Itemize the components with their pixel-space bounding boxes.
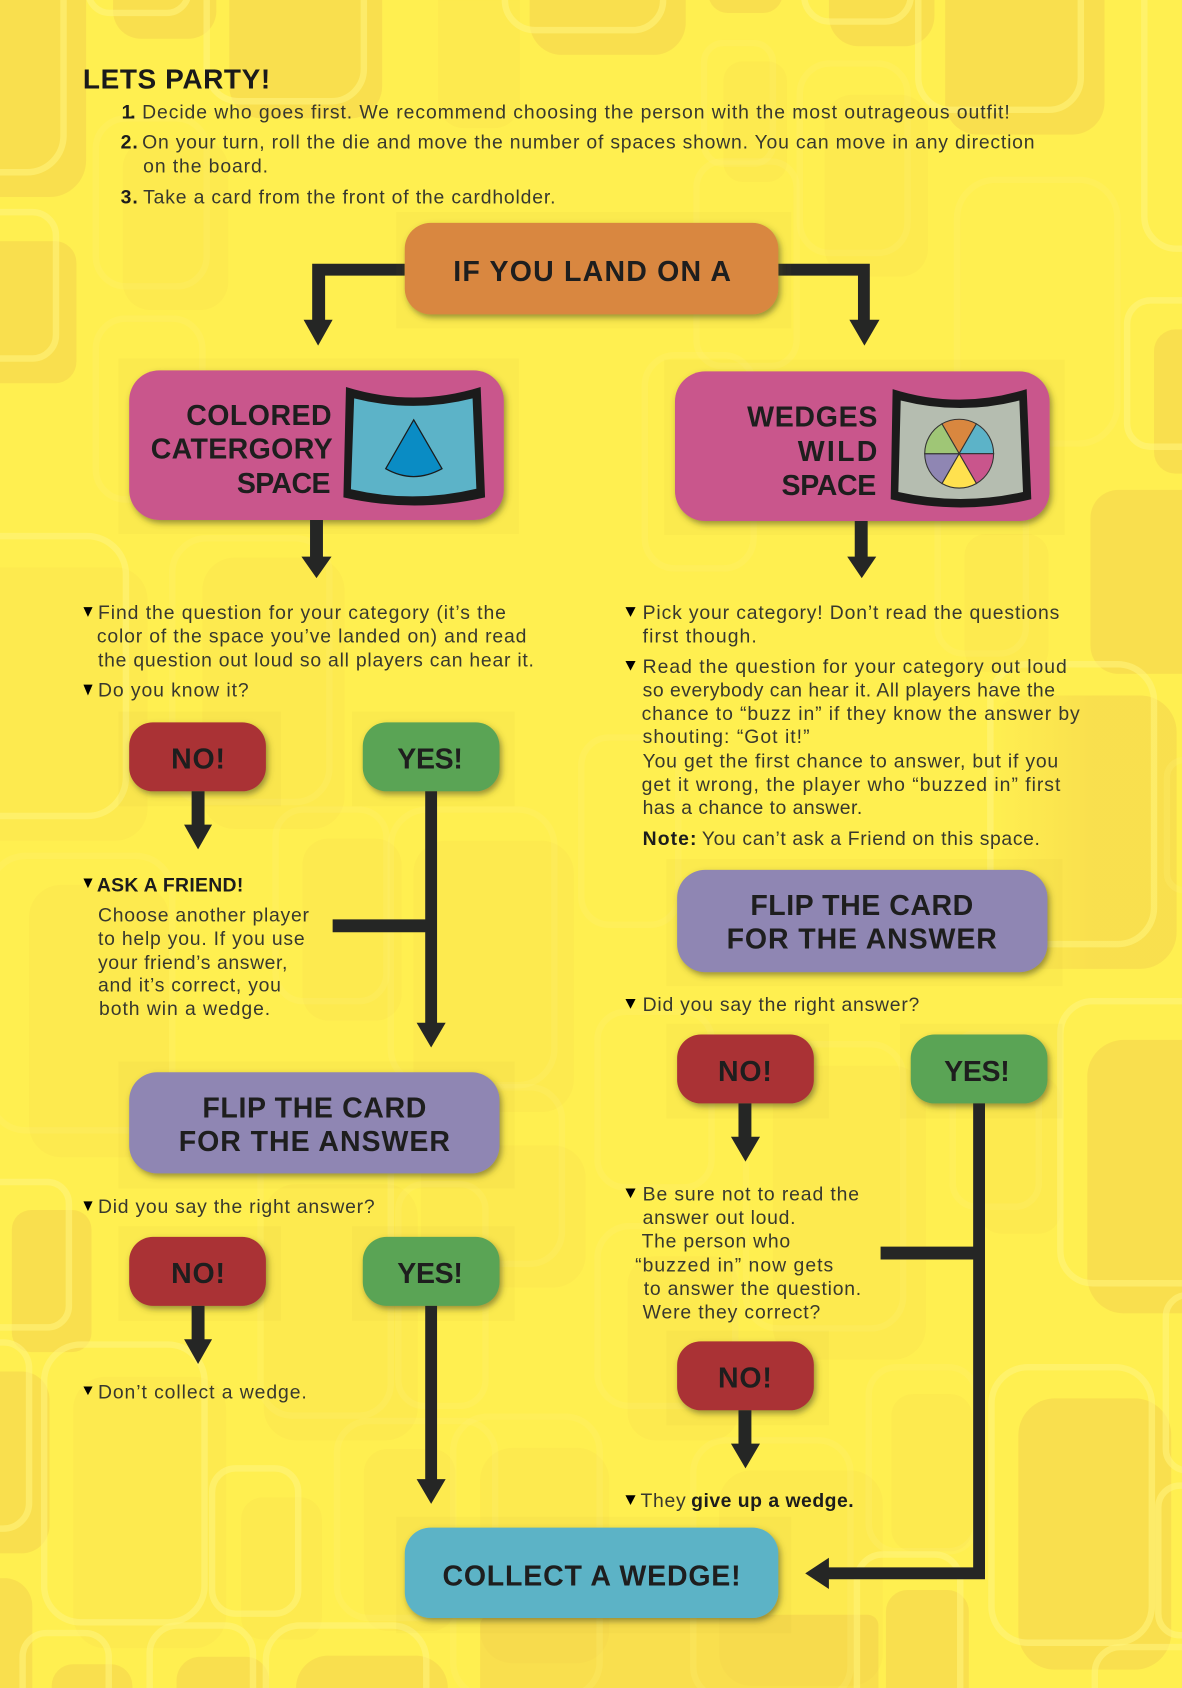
text block: ask a friend: Choose another player — [98, 905, 310, 927]
panel: wedges wild space: WEDGES — [747, 401, 877, 433]
text block: ask a friend: ASK A FRIEND! — [97, 874, 243, 896]
text block: ask a friend: and it’s correct, you — [98, 974, 281, 996]
box: flip the card (left) — [118, 1061, 515, 1188]
text block: be sure not to read: Were they correct? — [643, 1302, 821, 1324]
arrow: yes and ask a friend to flip card — [333, 791, 446, 1047]
box: collect a wedge: COLLECT A WEDGE! — [442, 1561, 741, 1593]
button: yes (know it): YES! — [397, 744, 463, 776]
text block: pick your category: so everybody can hear it. All players have the — [643, 680, 1055, 702]
numbered instructions: Take a card from the front of the cardholder. — [143, 186, 555, 208]
text block: pick your category: has a chance to answer. — [643, 797, 862, 819]
numbered instructions: On your turn, roll the die and move the number of spaces shown. You can move in any direction — [142, 132, 1035, 154]
button: yes (right answer): YES! — [944, 1056, 1010, 1088]
button: no (right answer): NO! — [718, 1056, 772, 1088]
text block: find the question: the question out loud so all players can hear it. — [98, 649, 534, 671]
arrow: no to dont collect — [184, 1306, 212, 1364]
text block: be sure not to read: “buzzed in” now gets — [635, 1254, 833, 1276]
icon: grey wild space with color wheel — [891, 389, 1031, 507]
box: flip the card (left): FLIP THE CARD — [202, 1092, 426, 1124]
button: yes (left answer): YES! — [397, 1258, 463, 1290]
text block: find the question: color of the space you’ve landed on) and read — [97, 626, 526, 648]
text block: be sure not to read: answer out loud. — [643, 1207, 796, 1229]
text block: be sure not to read: to answer the question. — [644, 1278, 861, 1300]
numbered instructions: 2. — [121, 132, 138, 154]
icon: blue category space with wedge — [343, 387, 485, 505]
box: flip the card (right) — [666, 859, 1063, 986]
arrow: no to ask a friend — [184, 791, 212, 849]
panel: wedges wild space: SPACE — [782, 470, 876, 502]
arrow: yes and buzzed in to collect a wedge — [805, 1103, 985, 1589]
text: they give up a wedge: They — [641, 1490, 686, 1512]
text block: pick your category: Read the question for your category out loud — [643, 656, 1067, 678]
arrow: wedges space to text — [847, 521, 876, 578]
panel: colored category space — [118, 358, 519, 534]
button: yes (right answer) — [900, 1024, 1063, 1119]
numbered instructions: Decide who goes first. We recommend choosing the person with the most outrageous outfit! — [142, 101, 1010, 123]
button: no (left answer): NO! — [171, 1258, 225, 1290]
text: did you say the right answer (left): Did you say the right answer? — [98, 1196, 375, 1218]
text block: pick your category: You can’t ask a Friend on this space. — [702, 828, 1040, 850]
panel: wedges wild space: WILD — [798, 436, 877, 468]
button: no (buzzed in): NO! — [718, 1363, 772, 1395]
box: flip the card (right): FOR THE ANSWER — [727, 923, 997, 955]
panel: colored category space: SPACE — [237, 468, 330, 500]
text block: pick your category: chance to “buzz in” if they know the answer by — [642, 703, 1080, 725]
text block: pick your category: You get the first chance to answer, but if you — [643, 751, 1058, 773]
text block: find the question — [83, 602, 534, 702]
text block: pick your category: shouting: “Got it!” — [643, 726, 810, 748]
box: if you land on a — [396, 212, 791, 328]
button: no (left answer) — [118, 1226, 281, 1321]
box: if you land on a: IF YOU LAND ON A — [453, 256, 731, 288]
text block: pick your category — [625, 602, 1080, 850]
text: they give up a wedge: give up a wedge. — [691, 1490, 854, 1512]
text: did you say the right answer (right): Did you say the right answer? — [643, 994, 920, 1016]
arrow: yes to collect a wedge — [417, 1306, 446, 1504]
arrow: start to colored space — [304, 264, 405, 346]
panel: wedges wild space — [664, 360, 1065, 535]
box: flip the card (right): FLIP THE CARD — [750, 890, 973, 922]
button: no (know it): NO! — [171, 744, 225, 776]
button: no (right answer) — [666, 1024, 829, 1119]
text block: be sure not to read: The person who — [642, 1231, 790, 1253]
arrow: no to be sure — [731, 1103, 760, 1162]
heading: lets party: LETS PARTY! — [83, 63, 270, 94]
button: no (know it) — [118, 712, 281, 806]
arrow: colored space to text — [301, 520, 332, 578]
arrow: start to wedges space — [778, 264, 880, 346]
button: yes (left answer) — [352, 1226, 515, 1321]
text block: pick your category: Note: — [643, 828, 696, 850]
box: collect a wedge — [396, 1517, 791, 1633]
text: dont collect a wedge: Don’t collect a wedge. — [98, 1381, 307, 1403]
numbered instructions — [121, 101, 1035, 208]
numbered instructions: 3. — [121, 186, 138, 208]
box: flip the card (left): FOR THE ANSWER — [179, 1126, 450, 1158]
text block: ask a friend: both win a wedge. — [99, 998, 270, 1020]
text block: pick your category: first though. — [643, 626, 757, 648]
button: no (buzzed in) — [666, 1331, 829, 1425]
arrow: no to give up a wedge — [731, 1410, 760, 1468]
text block: ask a friend: your friend’s answer, — [98, 952, 287, 974]
text block: pick your category: Pick your category! Don’t read the questions — [643, 602, 1059, 624]
text block: be sure not to read: Be sure not to read the — [643, 1183, 859, 1205]
panel: colored category space: COLORED — [186, 400, 332, 432]
text block: find the question: Find the question for your category (it’s the — [98, 602, 506, 624]
panel: colored category space: CATERGORY — [151, 434, 333, 466]
text block: find the question: Do you know it? — [98, 680, 249, 702]
text block: pick your category: get it wrong, the player who “buzzed in” first — [642, 774, 1061, 796]
button: yes (know it) — [352, 712, 515, 806]
numbered instructions: on the board. — [143, 155, 268, 177]
text block: be sure not to read — [625, 1183, 861, 1324]
numbered instructions: 1. — [122, 101, 136, 123]
text block: ask a friend: to help you. If you use — [98, 928, 305, 950]
text block: ask a friend — [83, 874, 310, 1020]
